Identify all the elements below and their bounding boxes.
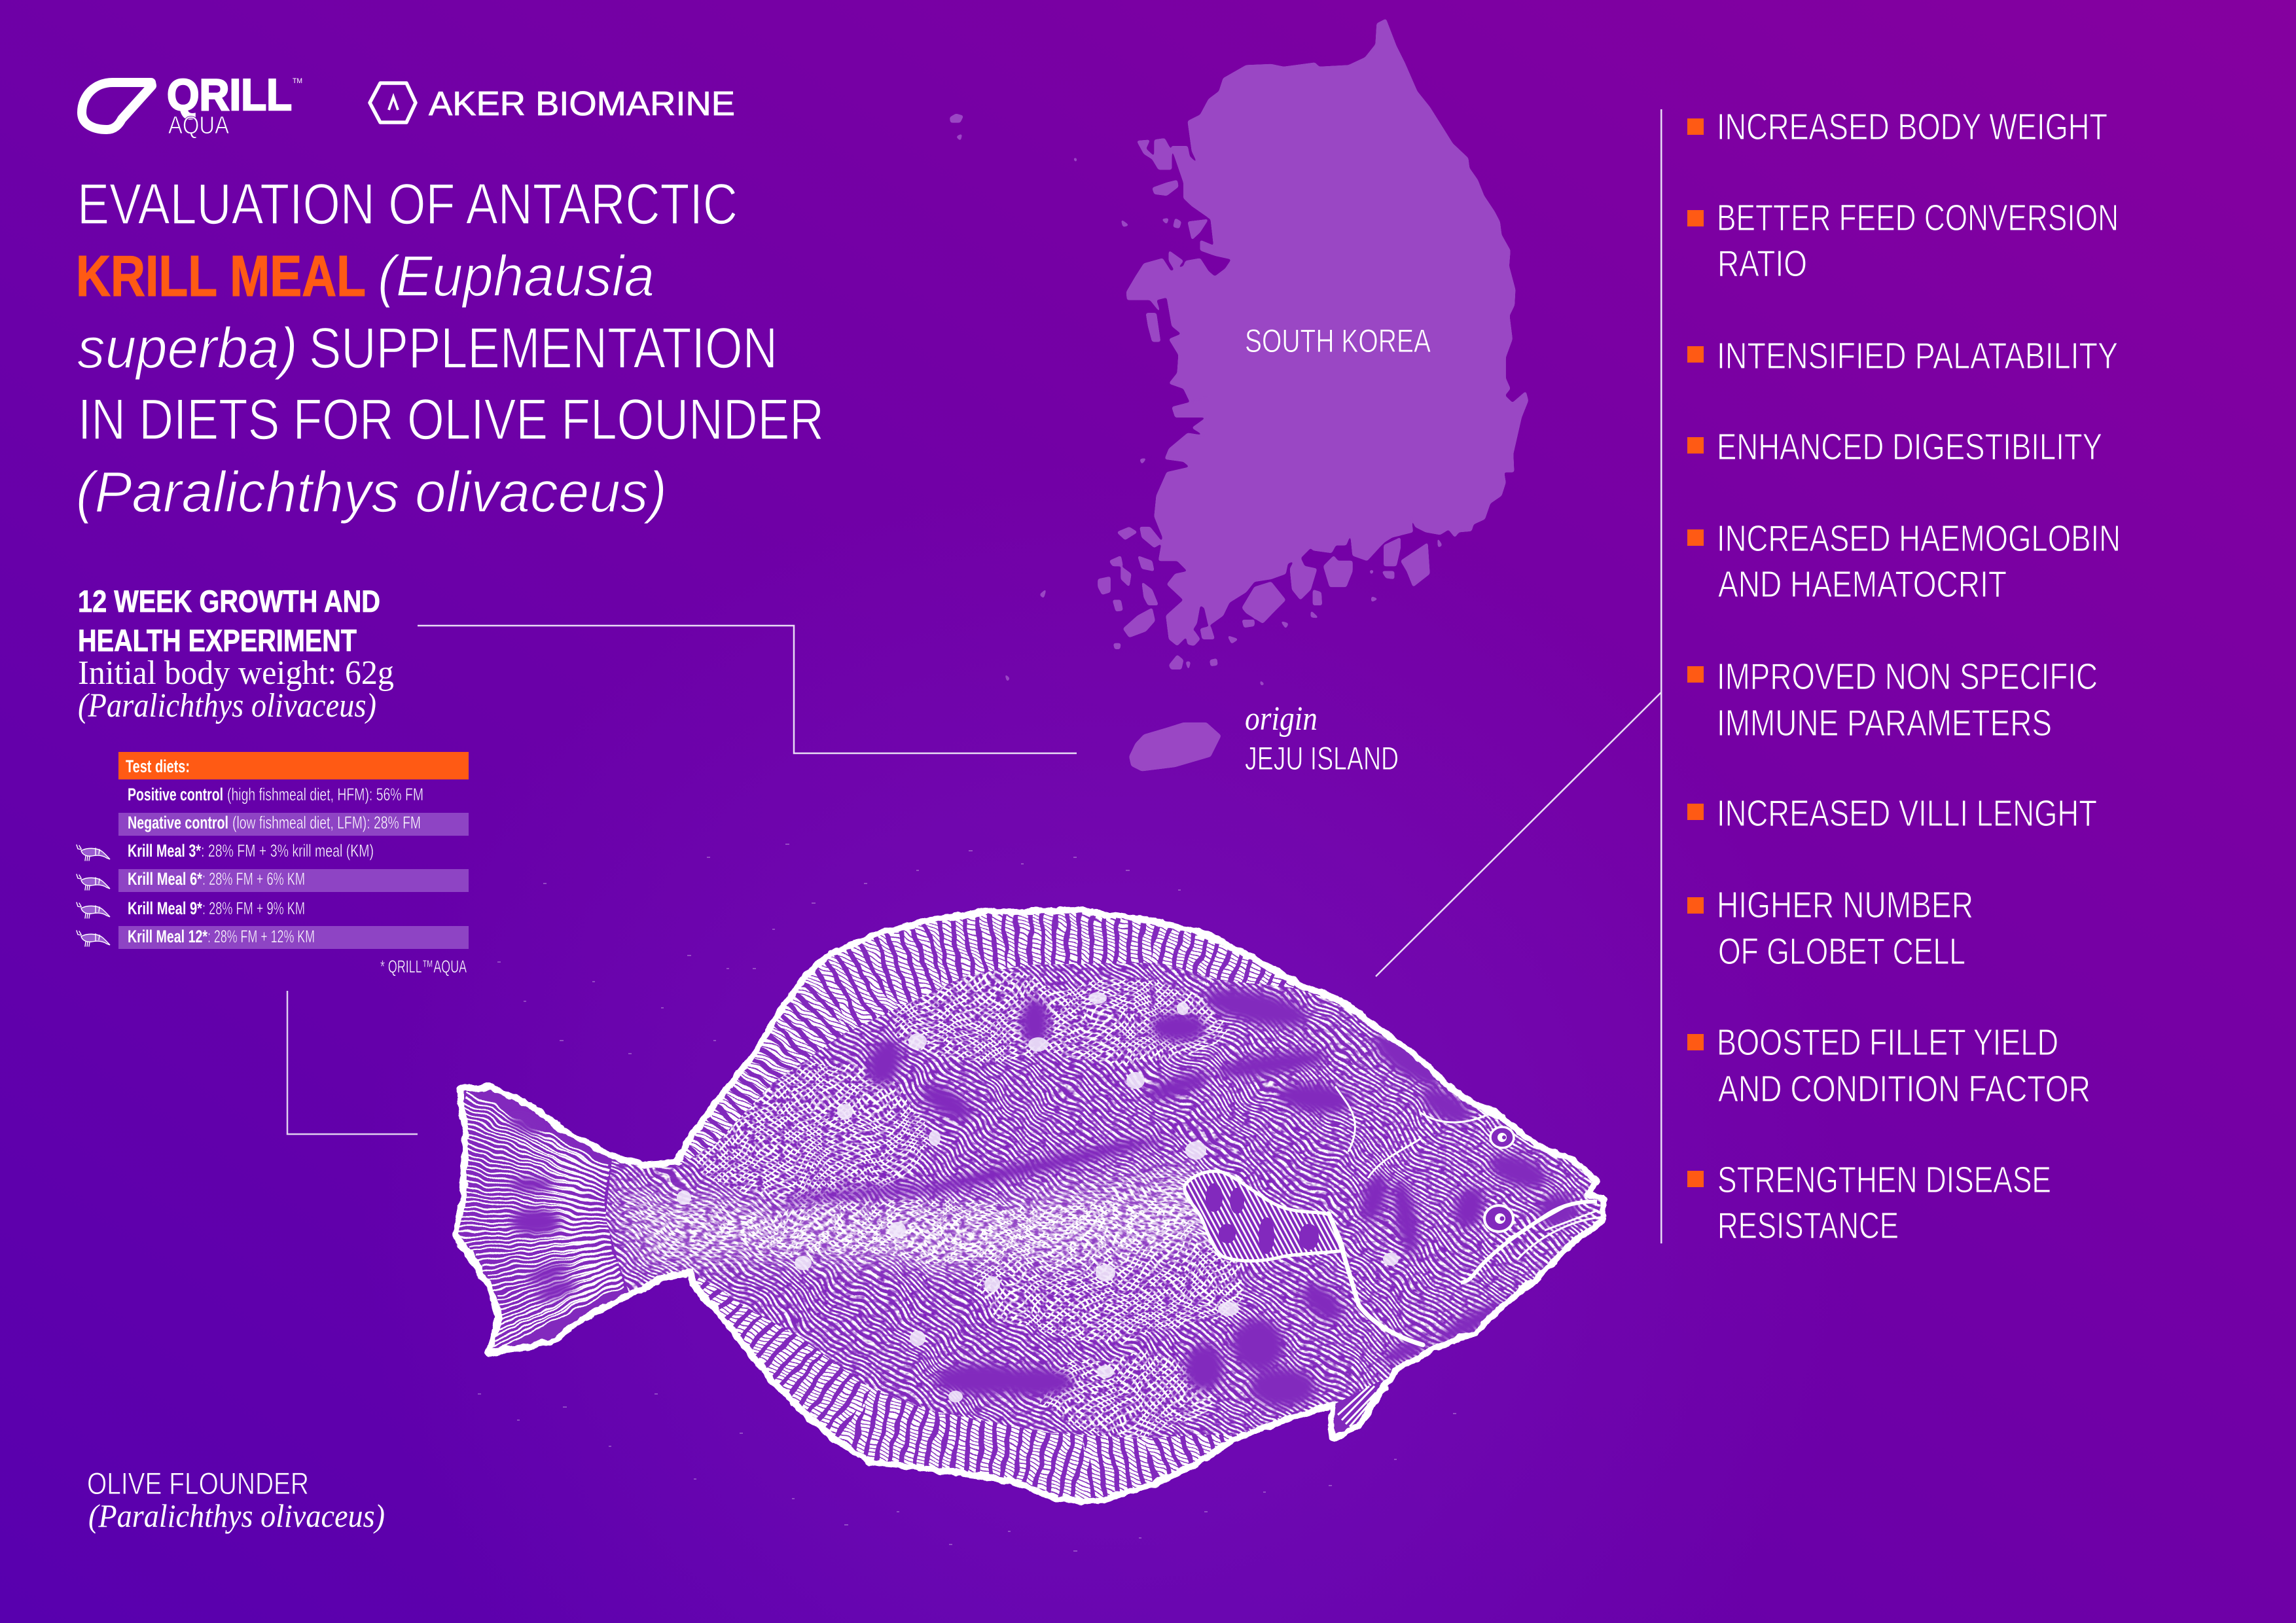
row: negative control: (low fishmeal diet, LFM): 28% FM (232, 813, 421, 832)
row: krill meal 12: Krill Meal 12* (128, 927, 207, 946)
benefit: goblet cells: HIGHER NUMBER (1717, 884, 1973, 926)
benefit: feed conversion: BETTER FEED CONVERSION (1717, 197, 2119, 239)
benefit: disease resistance (1687, 1159, 2051, 1247)
benefit: haemoglobin: AND HAEMATOCRIT (1718, 563, 2007, 605)
benefit: goblet cells: OF GLOBET CELL (1718, 931, 1965, 972)
logo: Aker Biomarine: AKER BIOMARINE (429, 85, 735, 123)
cross hatching patches (681, 975, 1250, 1433)
table footnote: * QRILL™AQUA (380, 957, 467, 976)
row: krill meal 6 (118, 869, 469, 892)
body (556, 916, 1630, 1479)
dorsal fin ray texture (681, 936, 1394, 1171)
eye: upper (1490, 1127, 1514, 1148)
icon: krill row 3 (77, 845, 110, 861)
table header: Test diets: (126, 757, 190, 776)
tail fin rays (458, 1092, 622, 1350)
map: South Korea (950, 19, 1528, 771)
gill cover line (1329, 1213, 1423, 1345)
row: krill meal 3: Krill Meal 3* (128, 841, 201, 861)
list divider (1660, 109, 1662, 1243)
row: krill meal 12: : 28% FM + 12% KM (207, 927, 315, 946)
body base (589, 942, 1623, 1453)
fish silhouette fill (455, 910, 1604, 1501)
small ventral fin (1331, 1380, 1382, 1438)
label: olive flounder (87, 1466, 385, 1534)
logos (82, 70, 735, 139)
row: krill meal 3 (128, 841, 374, 861)
benefit: fillet yield (1687, 1022, 2090, 1110)
experiment description (78, 584, 394, 724)
benefit: palatability: INTENSIFIED PALATABILITY (1717, 335, 2118, 377)
row: krill meal 9 (128, 899, 305, 918)
label: olive flounder: OLIVE FLOUNDER (87, 1466, 309, 1501)
eye: lower (1484, 1205, 1513, 1232)
title: IN DIETS FOR OLIVE FLOUNDER (78, 387, 824, 452)
benefit: immune (1687, 656, 2098, 744)
title (76, 171, 824, 524)
logo: QRILL AQUA (82, 70, 302, 139)
background dust speckles (478, 844, 1456, 1551)
benefits list (1660, 106, 2121, 1247)
experiment description: Initial body weight: 62g (78, 654, 394, 692)
benefit: fillet yield: AND CONDITION FACTOR (1718, 1068, 2090, 1110)
row: krill meal 9: : 28% FM + 9% KM (202, 899, 305, 918)
benefit: haemoglobin: INCREASED HAEMOGLOBIN (1717, 518, 2121, 560)
fish illustration: olive flounder (455, 910, 1630, 1501)
row: positive control (128, 785, 423, 804)
ventral fin ray texture (694, 1283, 1302, 1472)
experiment description: (Paralichthys olivaceus) (78, 687, 376, 724)
title: (Euphausia (378, 243, 655, 308)
body hatching (556, 916, 1630, 1479)
row: positive control: Positive control (128, 785, 223, 804)
benefit: villi: INCREASED VILLI LENGHT (1717, 793, 2097, 834)
label: origin Jeju Island: origin (1245, 700, 1318, 738)
main hatching (556, 916, 1630, 1479)
title: KRILL MEAL (76, 243, 366, 308)
islands (950, 114, 1443, 686)
connector: fish to benefits (1376, 692, 1661, 976)
benefit: immune: IMMUNE PARAMETERS (1717, 702, 2052, 744)
bright lateral band (556, 1113, 1276, 1309)
label: origin Jeju Island (1245, 700, 1399, 777)
experiment description: 12 WEEK GROWTH AND (78, 584, 380, 618)
dark blotches (785, 982, 1577, 1407)
lateral glow (556, 1113, 1276, 1309)
jaw lines (1505, 1207, 1600, 1260)
experiment description: HEALTH EXPERIMENT (78, 623, 357, 658)
ventral fin rays (694, 1283, 1302, 1472)
benefit: haemoglobin (1687, 518, 2121, 605)
fish outline (455, 910, 1604, 1501)
operculum arcs (1335, 1086, 1492, 1178)
row: krill meal 6: Krill Meal 6* (128, 869, 202, 889)
label: olive flounder: (Paralichthys olivaceus) (88, 1497, 385, 1534)
row: krill meal 6: : 28% FM + 6% KM (202, 869, 305, 889)
connector: table to fish (287, 991, 418, 1134)
row: negative control (118, 813, 469, 836)
mouth (1461, 1202, 1597, 1283)
dorsal fin rays (681, 936, 1394, 1171)
benefit: feed conversion: RATIO (1717, 243, 1807, 285)
title: EVALUATION OF ANTARCTIC (77, 171, 738, 236)
mainland (1126, 19, 1528, 646)
pale spots (677, 992, 1399, 1402)
Jeju island (1129, 722, 1221, 771)
icon: krill row 9 (77, 902, 110, 918)
icon: krill row 6 (77, 874, 110, 890)
benefit: disease resistance: STRENGTHEN DISEASE (1717, 1159, 2051, 1201)
label: South Korea: SOUTH KOREA (1245, 323, 1431, 359)
benefit: immune: IMPROVED NON SPECIFIC (1717, 656, 2098, 698)
fins rays (458, 936, 1394, 1472)
table header (118, 752, 469, 779)
logo: QRILL AQUA: QRILL (167, 70, 292, 120)
logo: QRILL AQUA: AQUA (168, 112, 230, 139)
benefit: digestibility: ENHANCED DIGESTIBILITY (1717, 426, 2102, 468)
row: positive control: (high fishmeal diet, HFM): 56% FM (227, 785, 423, 804)
table: test diets (118, 752, 469, 976)
benefit: body weight: INCREASED BODY WEIGHT (1717, 106, 2108, 148)
benefit: feed conversion (1687, 197, 2119, 285)
icon: krill row 12 (77, 931, 110, 946)
row: negative control: Negative control (128, 813, 228, 832)
tail blotches (507, 1112, 579, 1304)
title: (Paralichthys olivaceus) (76, 459, 667, 524)
row: krill meal 9: Krill Meal 9* (128, 899, 202, 918)
benefit: goblet cells (1687, 884, 1973, 972)
row: krill meal 3: : 28% FM + 3% krill meal (KM) (201, 841, 374, 861)
title: superba) (77, 315, 298, 380)
pectoral fin (1185, 1171, 1344, 1261)
benefit: fillet yield: BOOSTED FILLET YIELD (1717, 1022, 2058, 1063)
row: krill meal 12 (118, 926, 469, 949)
title: SUPPLEMENTATION (309, 315, 778, 380)
benefit: disease resistance: RESISTANCE (1717, 1205, 1899, 1247)
logo: QRILL AQUA: TM (293, 77, 302, 85)
label: origin Jeju Island: JEJU ISLAND (1245, 740, 1399, 777)
head details (1335, 1086, 1600, 1283)
connector: experiment to Jeju (418, 626, 1077, 753)
